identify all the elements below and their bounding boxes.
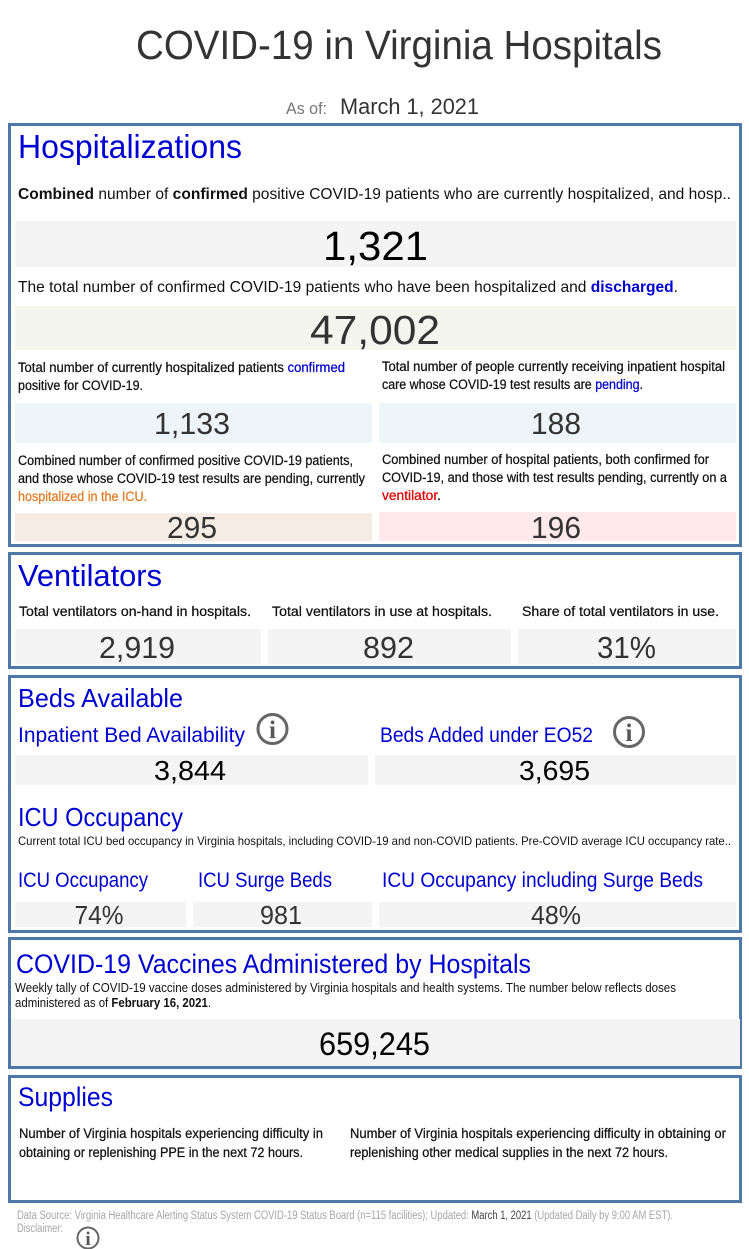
text: discharged description: The total number of confirmed COVID-19 patients who have been hospitalized and discharged.: [18, 279, 678, 296]
heading: vaccines: COVID-19 Vaccines Administered by Hospitals: [16, 949, 531, 979]
stat: ICU: [15, 510, 372, 545]
panel: hospitalizations: [10, 124, 740, 546]
heading: ventilators: Ventilators: [18, 558, 162, 593]
text: vaccine description: Weekly tally of COVID-19 vaccine doses administered by Virginia hospitals and health systems. The number below reflects doses: [15, 980, 676, 995]
stat: combined hospitalized: [15, 221, 736, 269]
footer: disclaimer: Disclaimer:: [17, 1223, 63, 1235]
stat: confirmed: [15, 403, 372, 443]
icon: info beds added: [614, 718, 644, 747]
stat: pending: [379, 403, 736, 443]
label: ICU occupancy: ICU Occupancy: [18, 869, 148, 892]
stat: in use: [268, 629, 511, 665]
panel: supplies: [10, 1076, 740, 1202]
label: in use: Total ventilators in use at hospitals.: [272, 604, 492, 619]
panel: vaccines: [10, 938, 740, 1068]
stat: on ventilator: [379, 510, 736, 545]
text: ventilator description: [382, 452, 727, 503]
stat: ICU occupancy with surge: [379, 900, 736, 930]
stat: in use: 892: [363, 630, 414, 665]
stat: pending: 188: [531, 406, 581, 441]
text: ICU description: Combined number of confirmed positive COVID-19 patients,: [18, 453, 353, 468]
text: ventilator description: Combined number of hospital patients, both confirmed for: [382, 452, 709, 467]
stat: vaccines: [11, 1019, 740, 1066]
stat: on ventilator: 196: [531, 510, 581, 545]
footer: data source: Data Source: Virginia Healthcare Alerting Status System COVID-19 Status Board (n=115 facilities); Updated: March 1, 2021 (Updated Daily by 9:00 AM EST).: [17, 1210, 673, 1222]
stat: ICU surge beds: [193, 900, 372, 930]
label: beds added: Beds Added under EO52: [380, 724, 593, 747]
stat: discharged: 47,002: [310, 307, 440, 353]
stat: confirmed: 1,133: [154, 406, 230, 441]
text: PPE description: [19, 1126, 323, 1160]
heading: beds available: Beds Available: [18, 683, 183, 713]
label: share: Share of total ventilators in use.: [522, 604, 719, 619]
text: PPE description: obtaining or replenishing PPE in the next 72 hours.: [19, 1145, 303, 1160]
icon: info disclaimer: [78, 1228, 98, 1249]
as-of date line: March 1, 2021: [340, 94, 479, 119]
panel: ventilators: [10, 554, 740, 668]
stat: ICU surge beds: 981: [260, 900, 302, 930]
text: pending description: [382, 359, 725, 392]
stat: ICU occupancy: 74%: [74, 900, 124, 930]
label: inpatient bed availability: Inpatient Bed Availability: [18, 724, 245, 747]
text: other supplies description: replenishing other medical supplies in the next 72 hours.: [350, 1145, 668, 1160]
icon: info beds added: i: [626, 720, 633, 747]
stat: share: 31%: [597, 630, 656, 665]
stat: ICU: 295: [167, 510, 217, 545]
label: ICU occupancy including surge beds: ICU Occupancy including Surge Beds: [382, 869, 703, 892]
text: other supplies description: Number of Virginia hospitals experiencing difficulty in obtaining or: [350, 1126, 726, 1141]
text: vaccine description: [15, 980, 676, 1010]
text: ICU description: [18, 453, 365, 504]
stat: ICU occupancy: [15, 900, 186, 930]
text: pending description: care whose COVID-19 test results are pending.: [382, 377, 643, 392]
stat: on-hand: 2,919: [99, 630, 175, 665]
label: ICU surge beds: ICU Surge Beds: [198, 869, 332, 892]
text: pending description: Total number of people currently receiving inpatient hospital: [382, 359, 725, 374]
text: confirmed description: Total number of currently hospitalized patients confirmed: [18, 360, 345, 375]
stat: beds added: [375, 755, 736, 786]
stat: share: [518, 629, 736, 665]
stat: discharged: [15, 306, 736, 353]
stat: inpatient beds: 3,844: [154, 755, 226, 786]
stat: on-hand: [15, 629, 261, 665]
text: ventilator description: COVID-19, and those with test results pending, currently on a: [382, 470, 727, 485]
text: ICU description: hospitalized in the ICU.: [18, 489, 147, 504]
text: other supplies description: [350, 1126, 726, 1160]
icon: info inpatient: [258, 714, 287, 744]
stat: vaccines: 659,245: [319, 1026, 430, 1062]
stat: ICU occupancy with surge: 48%: [531, 900, 581, 930]
panel: beds available: [10, 676, 740, 932]
text: confirmed description: [18, 360, 345, 393]
heading: ICU occupancy: ICU Occupancy: [18, 802, 183, 832]
stat: inpatient beds: [15, 755, 368, 786]
heading: hospitalizations: Hospitalizations: [18, 128, 242, 165]
as-of date line: As of:: [286, 99, 327, 118]
stat: beds added: 3,695: [519, 755, 590, 786]
text: ICU description: and those whose COVID-19 test results are pending, currently: [18, 471, 365, 486]
icon: info inpatient: i: [269, 717, 276, 744]
text: confirmed description: positive for COVID-19.: [18, 378, 143, 393]
label: on-hand: Total ventilators on-hand in hospitals.: [19, 604, 251, 619]
title: COVID-19 in Virginia Hospitals: [136, 22, 662, 68]
text: ventilator description: ventilator.: [382, 488, 441, 503]
heading: supplies: Supplies: [18, 1082, 113, 1112]
text: combined description: Combined number of confirmed positive COVID-19 patients who are currently hospitalized, and hosp..: [18, 186, 731, 203]
text: vaccine description: administered as of February 16, 2021.: [15, 995, 211, 1010]
stat: combined hospitalized: 1,321: [323, 223, 428, 269]
text: PPE description: Number of Virginia hospitals experiencing difficulty in: [19, 1126, 323, 1141]
